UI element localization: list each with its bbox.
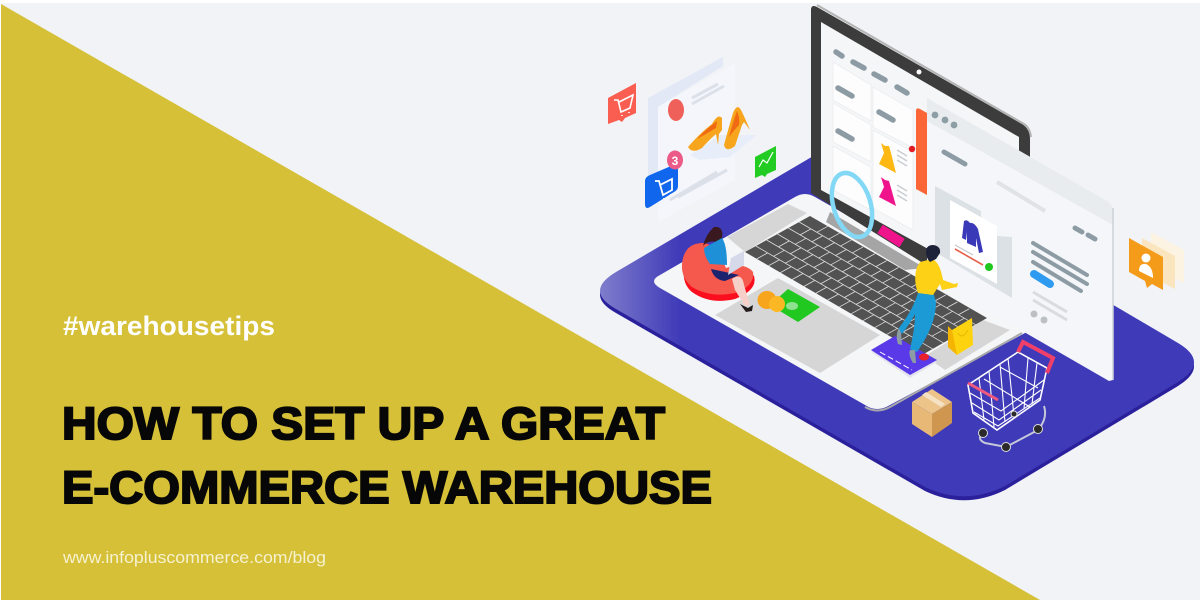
icon: blue cart notification [645,150,683,208]
icon: cash and coins [758,289,820,322]
credit card [871,336,937,378]
magnifying glass [825,168,902,243]
product description lines [1030,243,1087,324]
browser window [927,98,1113,381]
screen pills [836,52,907,139]
keyboard [745,216,987,355]
man figure [897,245,958,363]
woman on beanbag [682,227,755,312]
website url: www.infopluscommerce.com/blog [62,548,326,567]
title [62,398,712,513]
laptop base [654,194,1040,410]
shopping bag [948,318,973,355]
orange sidebar [916,108,927,195]
icon: sweater [962,220,983,253]
shopping cart [968,342,1053,452]
shoe ad panel [648,57,757,222]
hashtag: #warehousetips [63,311,275,341]
title line 2: E-COMMERCE WAREHOUSE [62,462,712,513]
cardboard box [912,389,952,437]
icon: red cart tag [608,83,636,124]
screen cards [833,62,913,230]
icon: high heel shoes [688,107,750,151]
icon: orange profile tag [1129,232,1184,290]
product image card [935,186,1012,298]
dress listing [879,143,915,206]
blue platform [600,149,1194,500]
title line 1: HOW TO SET UP A GREAT [62,398,665,449]
laptop screen [811,5,1031,280]
icon: green chart tag [755,146,776,178]
notification badge: 3 [672,154,679,168]
